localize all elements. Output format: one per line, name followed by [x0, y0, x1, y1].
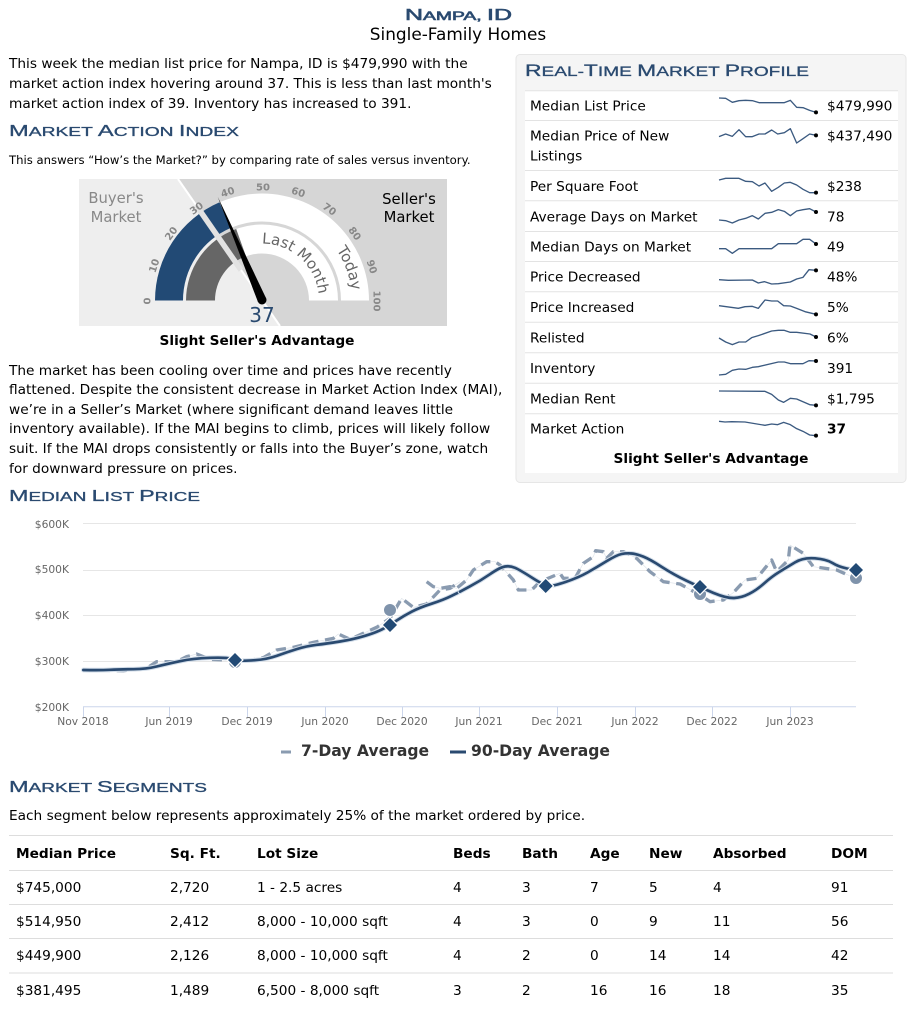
table row 3	[16, 948, 848, 964]
table row 3: 8,000 - 10,000 sqft	[257, 948, 388, 964]
profile row values: $1,795	[827, 391, 875, 407]
profile row labels: Median List Price	[530, 99, 646, 115]
panel: real-time market profile	[516, 54, 906, 482]
gauge scale labels: 60	[290, 186, 306, 200]
table row 1: 5	[649, 880, 658, 896]
table row 4: 1,489	[170, 983, 209, 999]
table row 2: 9	[649, 914, 658, 930]
gauge scale labels: 80	[345, 225, 363, 243]
table header: Sq. Ft.	[170, 846, 221, 862]
analysis paragraph: flattened. Despite the consistent decrease in Market Action Index (MAI),	[9, 382, 502, 398]
profile verdict: Slight Seller's Advantage	[614, 451, 808, 467]
sparklines lower rows	[719, 268, 818, 438]
table header: Age	[590, 846, 620, 862]
gauge last month track	[186, 224, 338, 300]
gauge scale labels	[142, 182, 382, 311]
profile row labels: Median Price of New	[530, 129, 669, 145]
table row 3: 2,126	[170, 948, 209, 964]
table row 2: 8,000 - 10,000 sqft	[257, 914, 388, 930]
title: Single-Family Homes	[370, 24, 546, 44]
buyer's market label	[88, 190, 144, 226]
gauge band labels: Last Month	[263, 232, 329, 293]
table row 1	[16, 880, 848, 896]
table: market segments	[9, 836, 893, 999]
gauge: market action index	[79, 179, 447, 327]
table row 1: 3	[522, 880, 531, 896]
table row 3: 4	[453, 948, 462, 964]
y axis labels: $500K	[35, 563, 70, 576]
table header: New	[649, 846, 683, 862]
table row 2: 2,412	[170, 914, 209, 930]
title: N AMPA, ID	[405, 7, 512, 24]
table row 2: $514,950	[16, 914, 81, 930]
heading: real-time market profile: R EAL- T IME M ARKET P ROFILE	[525, 61, 809, 80]
table header: DOM	[831, 846, 868, 862]
table row 4: 18	[713, 983, 730, 999]
x axis labels	[57, 715, 814, 728]
gauge scale labels: 50	[256, 182, 270, 194]
profile row values: $479,990	[827, 99, 892, 115]
table header: Median Price	[16, 846, 116, 862]
7-day markers	[228, 572, 862, 668]
gauge needle	[218, 197, 266, 304]
x axis labels: Dec 2019	[221, 715, 273, 728]
buyer's market label: Market	[91, 209, 142, 226]
gauge scale labels: 0	[142, 297, 154, 304]
table row 4	[16, 983, 848, 999]
gauge scale labels: 70	[320, 201, 338, 219]
y axis labels	[35, 518, 70, 714]
90-day markers	[228, 563, 863, 667]
table header	[16, 846, 868, 862]
profile row values: 391	[827, 361, 853, 377]
x axis labels: Jun 2020	[300, 715, 349, 728]
profile row labels: Price Increased	[530, 300, 634, 316]
table row 3: 14	[649, 948, 666, 964]
analysis paragraph: inventory available). If the MAI begins to climb, prices will likely follow	[9, 421, 490, 437]
profile row labels: Per Square Foot	[530, 179, 639, 195]
gauge scale labels: 100	[370, 291, 382, 311]
seller's market label: Market	[384, 209, 435, 226]
table row 1: 4	[453, 880, 462, 896]
profile row values: 49	[827, 240, 844, 256]
gauge band labels	[263, 232, 360, 293]
intro paragraph: market action index hovering around 37. This is less than last month's	[9, 76, 492, 92]
table row 2: 0	[590, 914, 599, 930]
line chart: median list price	[35, 518, 863, 728]
analysis paragraph: for downward pressure on prices.	[9, 461, 238, 477]
y axis labels: $300K	[35, 655, 70, 668]
legend: 7-day average: 7-Day Average	[301, 742, 429, 760]
y axis labels: $200K	[35, 701, 70, 714]
table row 3: 14	[713, 948, 730, 964]
table row 3: $449,900	[16, 948, 81, 964]
table row 1: 4	[713, 880, 722, 896]
gauge value: 37	[249, 303, 275, 327]
table row 4: 2	[522, 983, 531, 999]
table row 1: 7	[590, 880, 599, 896]
table row 3: 0	[590, 948, 599, 964]
table header: Absorbed	[713, 846, 787, 862]
gauge scale labels: 90	[364, 259, 378, 275]
table row 1: 1 - 2.5 acres	[257, 880, 342, 896]
table row 3: 42	[831, 948, 848, 964]
x axis labels: Dec 2021	[531, 715, 583, 728]
table header: Beds	[453, 846, 491, 862]
market segments description: Each segment below represents approximately 25% of the market ordered by price.	[9, 808, 585, 824]
profile row labels: Market Action	[530, 422, 624, 438]
profile row values: 78	[827, 209, 844, 225]
buyer's market label: Buyer's	[88, 190, 144, 207]
gauge scale labels: 40	[220, 186, 236, 200]
heading: median list price: M EDIAN L IST P RICE	[9, 488, 200, 505]
profile row values: 37	[827, 422, 846, 438]
table row 1: 91	[831, 880, 848, 896]
x axis labels: Jun 2023	[765, 715, 814, 728]
table row 2: 56	[831, 914, 848, 930]
table row 4: 35	[831, 983, 848, 999]
analysis paragraph	[8, 363, 502, 477]
analysis paragraph: we’re in a Seller’s Market (where significant demand leaves little	[9, 402, 453, 418]
chart legend	[281, 742, 610, 760]
profile row labels: Median Rent	[530, 391, 616, 407]
table row 2: 4	[453, 914, 462, 930]
intro paragraph	[8, 56, 492, 112]
profile row labels: Inventory	[530, 361, 595, 377]
y axis labels: $400K	[35, 609, 70, 622]
title	[370, 7, 546, 44]
x axis labels: Jun 2022	[610, 715, 659, 728]
table row 4: 16	[590, 983, 607, 999]
heading: market segments: M ARKET S EGMENTS	[9, 779, 207, 796]
gauge today track	[155, 194, 369, 300]
profile row values	[827, 99, 892, 438]
x axis labels: Nov 2018	[57, 715, 109, 728]
intro paragraph: market action index of 39. Inventory has increased to 391.	[9, 96, 411, 112]
profile row values: $437,490	[827, 129, 892, 145]
profile row labels: Median Days on Market	[530, 240, 692, 256]
profile row labels: Price Decreased	[530, 270, 641, 286]
table row 2: 3	[522, 914, 531, 930]
90-day average series	[83, 553, 856, 670]
profile row values: $238	[827, 179, 862, 195]
y axis labels: $600K	[35, 518, 70, 531]
table row 4: 16	[649, 983, 666, 999]
table row 4: 3	[453, 983, 462, 999]
gauge last month value arc	[186, 229, 246, 300]
gauge scale labels: 20	[163, 225, 181, 243]
intro paragraph: This week the median list price for Nampa, ID is $479,990 with the	[8, 56, 468, 72]
profile row values: 5%	[827, 300, 849, 316]
gauge scale labels: 30	[188, 200, 206, 218]
x axis labels: Dec 2020	[376, 715, 428, 728]
table row 1: 2,720	[170, 880, 209, 896]
x axis labels: Dec 2022	[686, 715, 738, 728]
profile row values: 6%	[827, 330, 849, 346]
table row 2: 11	[713, 914, 730, 930]
table row 2	[16, 914, 848, 930]
profile row labels: Average Days on Market	[530, 209, 698, 225]
analysis paragraph: The market has been cooling over time and prices have recently	[8, 363, 452, 379]
market action subtitle: This answers “How’s the Market?” by comparing rate of sales versus inventory.	[8, 153, 471, 167]
profile row values: 48%	[827, 270, 857, 286]
profile row labels: Listings	[530, 149, 582, 165]
profile row labels: Relisted	[530, 330, 585, 346]
x axis labels: Jun 2019	[144, 715, 193, 728]
table header: Bath	[522, 846, 558, 862]
sparklines upper rows	[719, 98, 818, 253]
heading: market action index: M ARKET A CTION INDEX	[9, 123, 240, 140]
x axis labels: Jun 2021	[454, 715, 503, 728]
seller's market label: Seller's	[382, 191, 436, 208]
legend: 90-day average: 90-Day Average	[471, 742, 610, 760]
table header: Lot Size	[257, 846, 318, 862]
7-day average series	[83, 545, 856, 671]
seller's market label	[382, 191, 436, 226]
table row 4: 6,500 - 8,000 sqft	[257, 983, 380, 999]
gauge caption: Slight Seller's Advantage	[160, 333, 354, 349]
analysis paragraph: suit. If the MAI drops consistently or falls into the Buyer’s zone, watch	[9, 441, 488, 457]
table row 1: $745,000	[16, 880, 81, 896]
gauge scale labels: 10	[148, 258, 162, 274]
gauge today value arc	[155, 202, 231, 300]
table row 4: $381,495	[16, 983, 81, 999]
table row 3: 2	[522, 948, 531, 964]
gauge band labels: Today	[338, 244, 360, 289]
profile row labels	[530, 99, 698, 438]
